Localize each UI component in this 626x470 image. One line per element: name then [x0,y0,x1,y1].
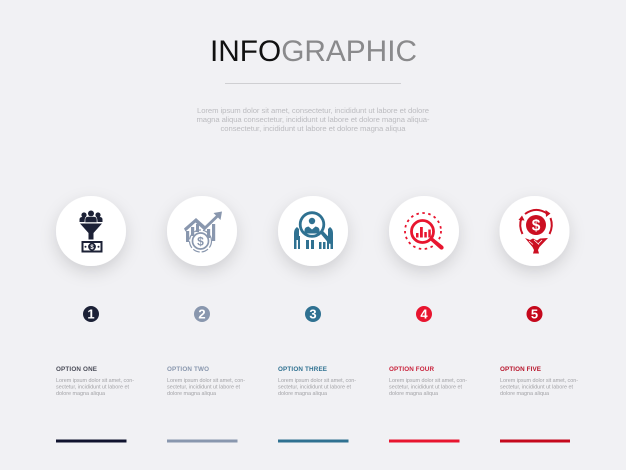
icon: rising chart with dollar coin [184,212,222,252]
icon circle one [56,196,126,266]
intro text: consectetur, incididunt ut labore et dolore magna aliqua [220,124,406,133]
number badge four [416,306,432,322]
option one text: dolore magna aliqua [56,391,106,397]
option three text: OPTION THREE [278,366,327,373]
icon circle five [500,196,570,266]
number badge three: 3 [309,306,317,322]
panel: option two [167,196,245,442]
icon: funnel with people and banknote [80,210,102,252]
number badge two [194,306,210,322]
option one text [56,366,134,397]
option five text: dolore magna aliqua [500,391,550,397]
panel: option five [500,196,578,442]
option five text: sectetur, incididunt ut labore et [500,384,573,390]
option four text: dolore magna aliqua [389,391,439,397]
option four text [389,366,467,397]
panel: option one [56,196,134,442]
option two text: OPTION TWO [167,366,209,373]
option five text: Lorem ipsum dolor sit amet, con- [500,378,578,384]
number badge one: 1 [87,306,95,322]
intro text [196,106,430,133]
number badge five [526,306,542,322]
option two text: dolore magna aliqua [167,391,217,397]
icon: magnifier with bars and dotted ring [405,213,444,250]
option three text: Lorem ipsum dolor sit amet, con- [278,378,356,384]
intro text: Lorem ipsum dolor sit amet, consectetur, incididunt ut labore et dolore [197,106,429,115]
icon circle four [389,196,459,266]
accent bar four [389,440,460,442]
icon: funnel with people and banknote: $ [90,245,94,251]
option two text: Lorem ipsum dolor sit amet, con- [167,378,245,384]
icon: magnifier over people [294,213,333,249]
intro text: magna aliqua consectetur, incididunt ut labore et dolore magna aliqua- [196,115,430,124]
icon: dollar coin with circular arrows and handshake: $ [532,218,541,234]
icon circle three [278,196,348,266]
panel: option four [389,196,467,442]
option five text [500,366,578,397]
number badge one [83,306,99,322]
number badge two: 2 [198,306,206,322]
accent bar one [56,440,126,442]
option one text: sectetur, incididunt ut labore et [56,384,129,390]
option two text [167,366,245,397]
number badge five: 5 [531,306,538,322]
number badge four: 4 [420,306,428,322]
option four text: sectetur, incididunt ut labore et [389,384,462,390]
panel: option three [278,196,356,442]
icon circle two [167,196,237,266]
accent bar three [278,440,348,442]
option three text: dolore magna aliqua [278,391,328,397]
option two text: sectetur, incididunt ut labore et [167,384,240,390]
accent bar two [167,440,238,442]
option three text: sectetur, incididunt ut labore et [278,384,351,390]
option five text: OPTION FIVE [500,366,541,373]
icon: rising chart with dollar coin: $ [197,234,204,248]
accent bar five [500,440,570,442]
option four text: OPTION FOUR [389,366,434,373]
option four text: Lorem ipsum dolor sit amet, con- [389,378,467,384]
icon: dollar coin with circular arrows and handshake [518,210,552,254]
title: INFOGRAPHIC [210,35,417,68]
number badge three [305,306,321,322]
option one text: Lorem ipsum dolor sit amet, con- [56,378,134,384]
option three text [278,366,356,397]
option one text: OPTION ONE [56,366,97,373]
